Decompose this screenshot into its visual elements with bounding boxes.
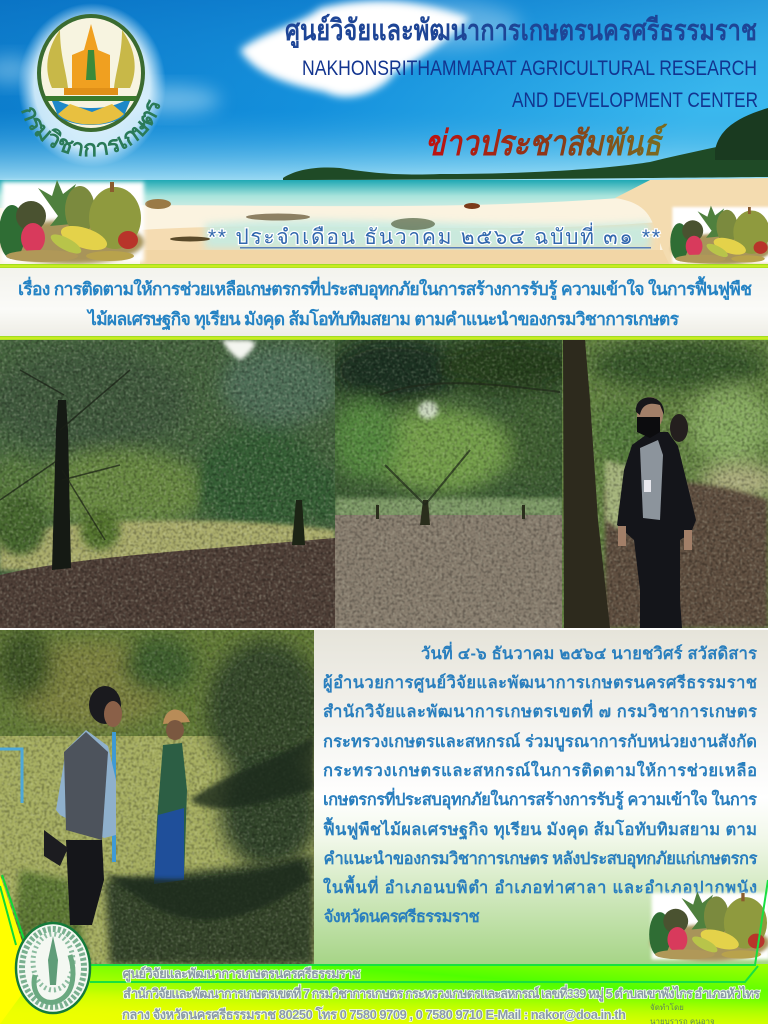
tree trunk (563, 340, 610, 628)
text panel (314, 630, 768, 965)
durian branch (105, 735, 314, 920)
body text: กระทรวงเกษตรและสหกรณ์ ร่วมบูรณาการกับหน่วยงานสังกัด (323, 732, 757, 753)
farmer with hat (154, 709, 190, 884)
footer text: ศูนย์วิจัยและพัฒนาการเกษตรนครศรีธรรมราช (123, 966, 361, 982)
banner: beach scene (0, 0, 768, 265)
logo: department of agriculture (19, 4, 165, 166)
fruit image right (670, 206, 768, 264)
title panel (0, 264, 768, 340)
title line two: ไม้ผลเศรษฐกิจ ทุเรียน มังคุด ส้มโอทับทิมสยาม ตามคำแนะนำของกรมวิชาการเกษตร (86, 308, 680, 331)
body text: สำนักวิจัยและพัฒนาการเกษตรเขตที่ ๗ กรมวิชาการเกษตร (323, 699, 757, 721)
footer text: สำนักวิจัยและพัฒนาการเกษตรเขตที่ 7 กรมวิชาการเกษตร กระทรวงเกษตรและสหกรณ์ เลขที่339 หมู่ 5 ตำบลเขาพังไกร อำเภอหัวไทร (123, 984, 760, 1002)
man with vest (44, 686, 122, 925)
logo caption: กรมวิชาการเกษตร (21, 99, 160, 157)
heading: press release: ข่าวประชาสัมพันธ์ (425, 123, 668, 163)
body text: ผู้อำนวยการศูนย์วิจัยและพัฒนาการเกษตรนครศรีธรรมราช (323, 673, 757, 694)
issue line: ** ประจำเดือน ธันวาคม ๒๕๖๔ ฉบับที่ ๓๑ ** (208, 222, 660, 249)
person (617, 397, 696, 628)
heading: center name (285, 13, 758, 112)
body text: กระทรวงเกษตรและสหกรณ์ในการติดตามให้การช่วยเหลือ (323, 760, 757, 780)
fruit image bottom (649, 891, 768, 961)
body text: ในพื้นที่ อำเภอนบพิตำ อำเภอท่าศาลา และอำเภอปากพนัง (323, 875, 757, 897)
body text (323, 641, 758, 926)
fruit image left (0, 180, 144, 264)
body text: วันที่ ๔-๖ ธันวาคม ๒๕๖๔ นายชวิศร์ สวัสดิสาร (421, 641, 757, 663)
photo: orchard floor (335, 340, 562, 628)
credit: จัดทำโดย (650, 1002, 684, 1012)
photo: field inspection (0, 630, 323, 965)
body text: ฟื้นฟูพืชไม้ผลเศรษฐกิจ ทุเรียน มังคุด ส้มโอทับทิมสยาม ตาม (323, 817, 757, 841)
body text: จังหวัดนครศรีธรรมราช (324, 907, 480, 926)
photo: officer in orchard (562, 340, 768, 628)
body text: คำแนะนำของกรมวิชาการเกษตร หลังประสบอุทกภัยแก่เกษตรกร (323, 849, 758, 869)
photo: durian trees (0, 340, 340, 628)
title line one: เรื่อง การติดตามให้การช่วยเหลือเกษตรกรที่ประสบอุทกภัยในการสร้างการรับรู้ ความเข้าใจ ในการฟื้นฟูพืช (18, 276, 752, 301)
footer text: กลาง จังหวัดนครศรีธรรมราช 80250 โทร 0 7580 9709 , 0 7580 9710 E-Mail : nakor@doa.in.th (122, 1006, 626, 1022)
footer text (122, 966, 760, 1022)
body text: เกษตรกรที่ประสบอุทกภัยในการสร้างการรับรู้ ความเข้าใจ ในการ (323, 787, 757, 811)
seal: regional office (16, 923, 90, 1013)
footer band (0, 875, 768, 1024)
credit (650, 1002, 715, 1024)
